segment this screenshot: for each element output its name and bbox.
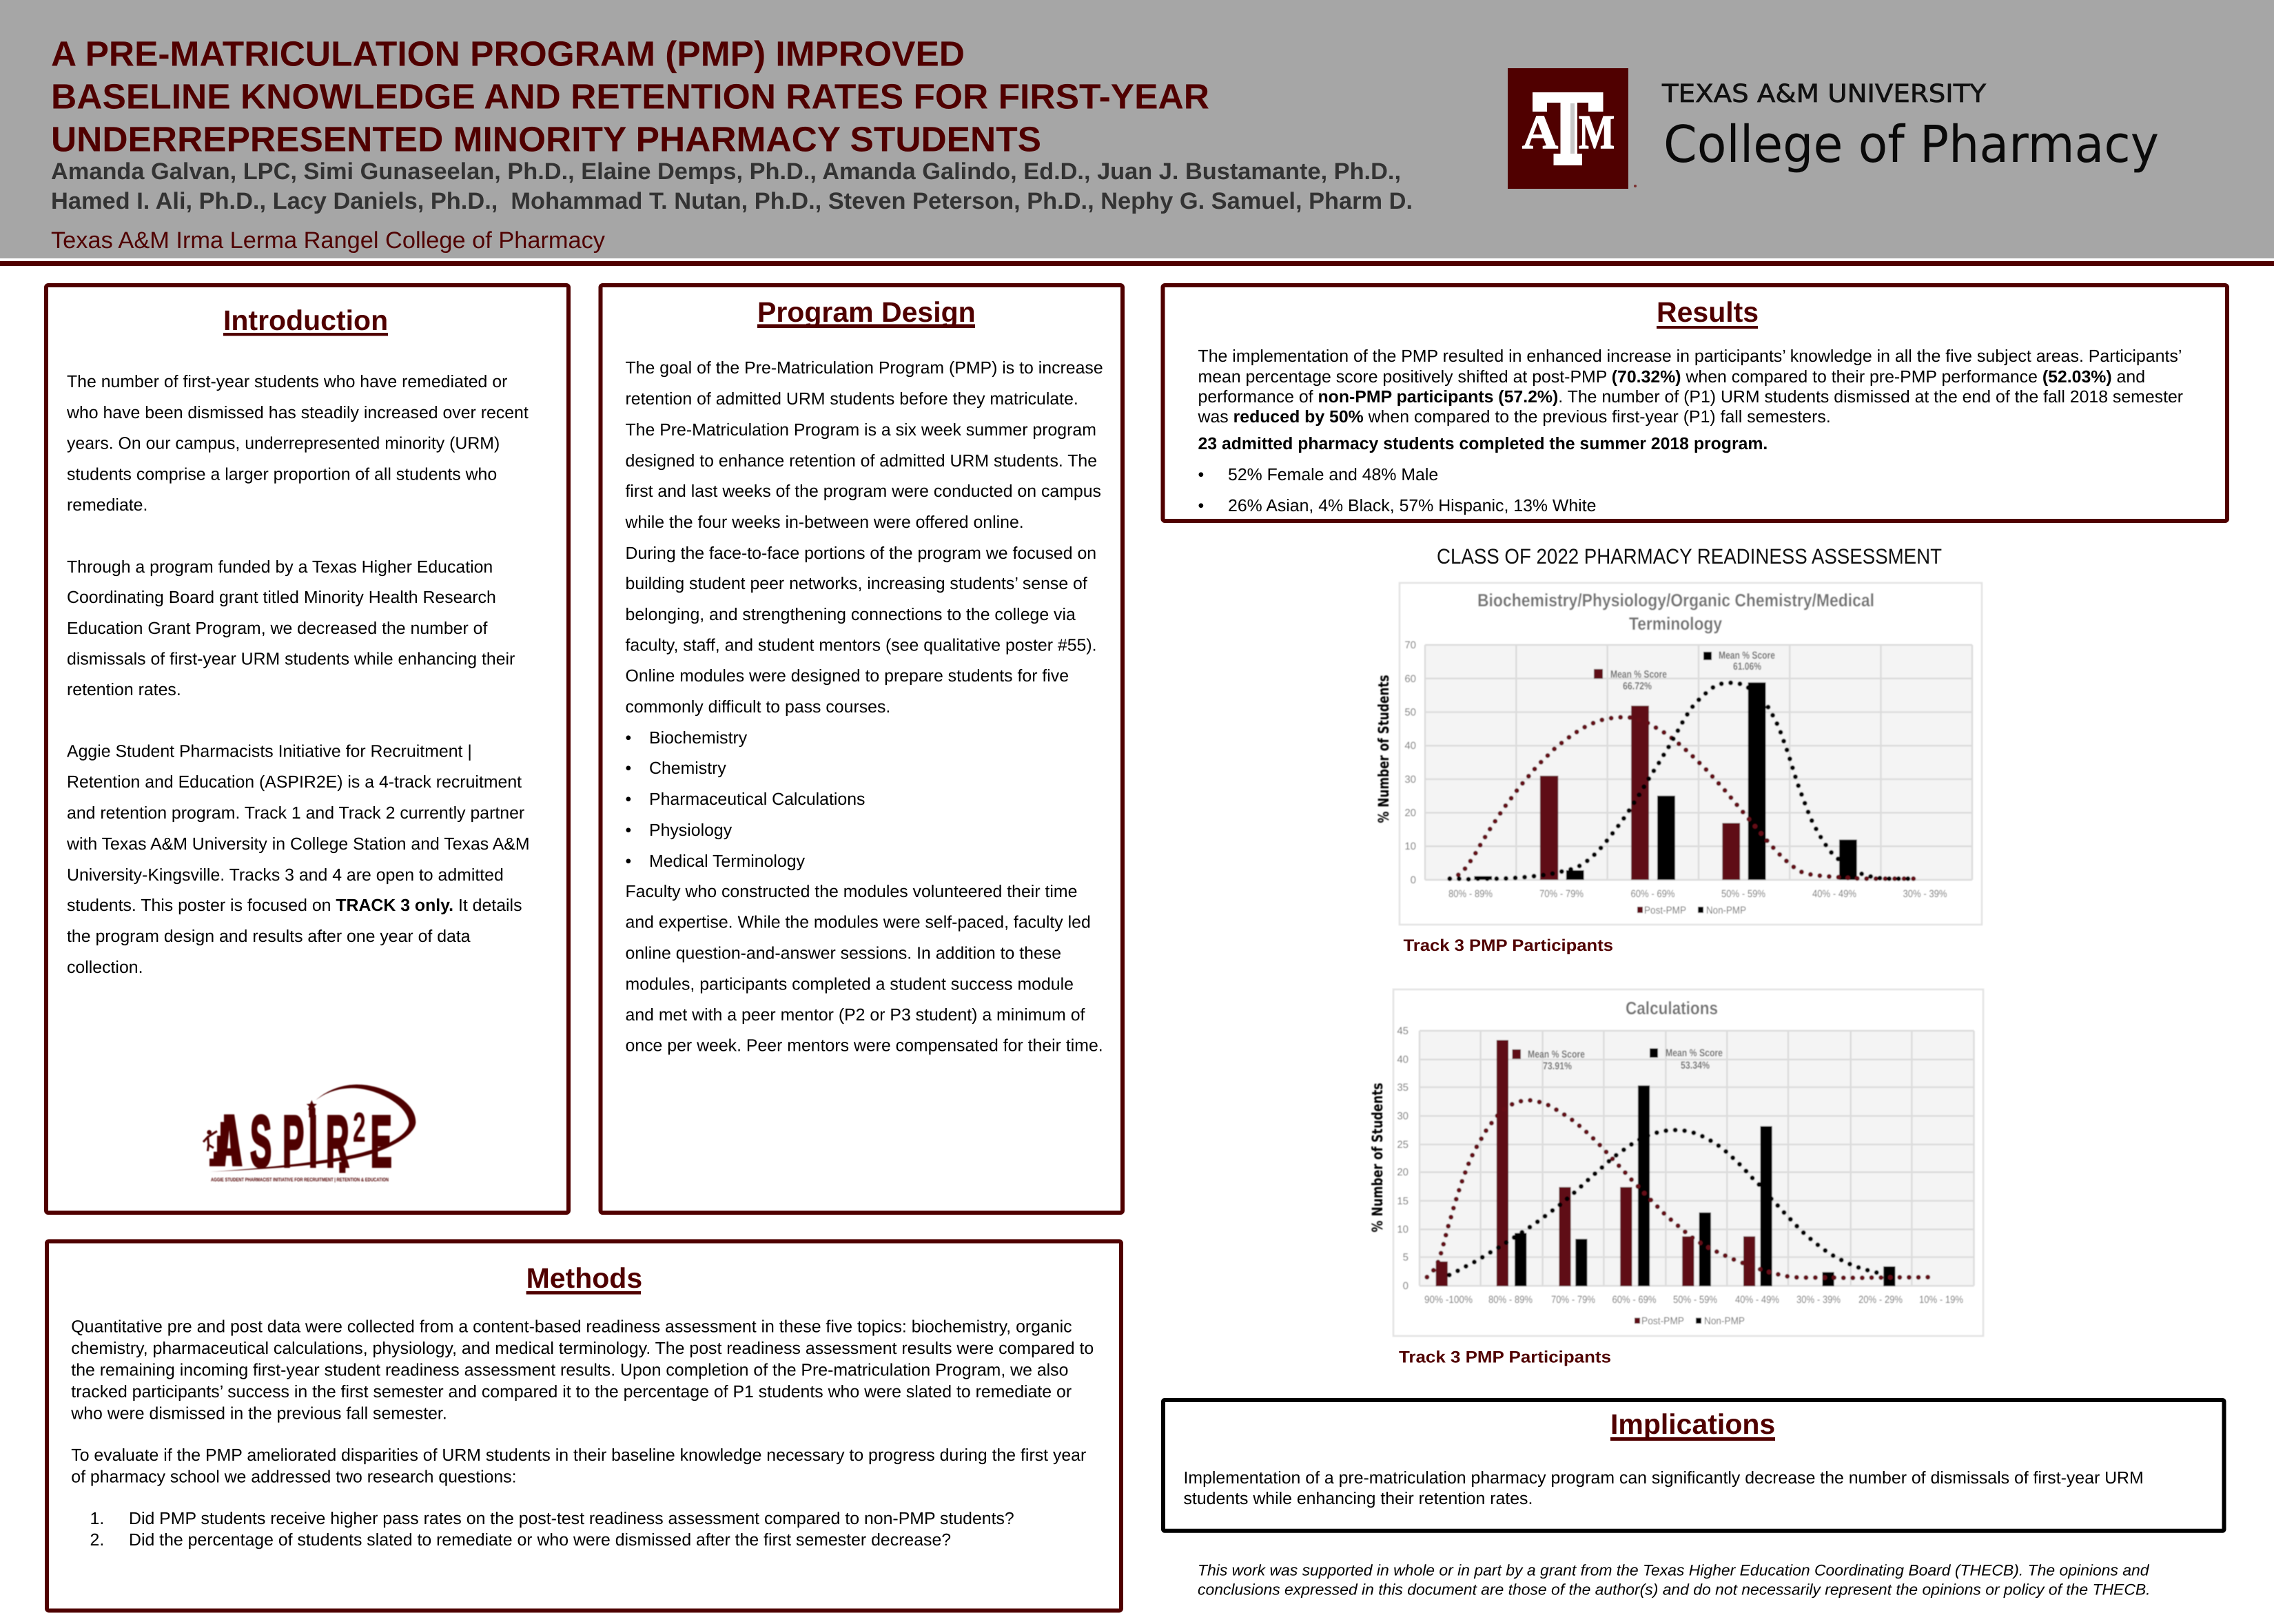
program design bullet list: • [626,790,631,809]
methods text: To evaluate if the PMP ameliorated disparities of URM students in their baseline knowledge necessary to progress during the first year [71,1446,1086,1465]
program design closing text: and met with a peer mentor (P2 or P3 student) a minimum of [626,1006,1085,1025]
program design bullet list: • [626,759,631,778]
results bullets: • [1198,466,1204,484]
program design text: retention of admitted URM students before they matriculate. [626,390,1078,409]
introduction text: Coordinating Board grant titled Minority Health Research [67,588,496,607]
x axis labels: 10% - 19% [1919,1294,1963,1306]
program design text: The Pre-Matriculation Program is a six week summer program [626,421,1096,440]
authors: Hamed I. Ali, Ph.D., Lacy Daniels, Ph.D., Mohammad T. Nutan, Ph.D., Steven Peterson, Ph.D., Nephy G. Samuel, Pharm D. [51,188,1413,214]
results text: The implementation of the PMP resulted in enhanced increase in participants’ knowledge in all the five subject areas. Participants’ [1198,347,2182,366]
introduction text: Through a program funded by a Texas Higher Education [67,558,493,577]
logo wordmark [1661,80,2159,174]
y axis ticks: 10 [1397,1224,1409,1235]
y axis ticks: 50 [1404,707,1416,718]
authors [51,158,1413,214]
introduction text: the program design and results after one year of data [67,927,471,946]
results bullets: 26% Asian, 4% Black, 57% Hispanic, 13% White [1228,497,1596,515]
x axis labels: 60% - 69% [1612,1294,1657,1306]
mean score annotations: Mean % Score [1666,1047,1723,1059]
results bullets: • [1198,497,1204,515]
methods text: chemistry, pharmaceutical calculations, physiology, and medical terminology. The post readiness assessment results were compared to [71,1339,1094,1358]
y axis ticks: 5 [1403,1251,1409,1264]
bars and distribution curves [1450,682,1916,880]
legend [1637,905,1746,916]
results text: was reduced by 50% when compared to the previous first-year (P1) fall semesters. [1198,408,1831,426]
y axis ticks: 20 [1397,1166,1409,1178]
y axis ticks: 40 [1404,740,1416,752]
program design text: faculty, staff, and student mentors (see qualitative poster #55). [626,637,1097,655]
mean score annotations: 53.34% [1681,1060,1710,1071]
research questions: 2. [90,1531,104,1550]
heading: methods: Methods [526,1262,642,1294]
x axis labels: 70% - 79% [1551,1294,1595,1306]
program design bullet list: • [626,729,631,748]
x axis labels: 90% -100% [1424,1294,1473,1306]
y axis ticks: 40 [1397,1054,1409,1065]
legend: Post-PMP [1641,1315,1684,1327]
header band [0,0,2274,266]
research questions: Did the percentage of students slated to remediate or who were dismissed after the first semester decrease? [129,1531,951,1550]
program design text: designed to enhance retention of admitted URM students. The [626,452,1097,471]
logo: ASPIR2E: AGGIE STUDENT PHARMACIST INITIATIVE FOR RECRUITMENT | RETENTION & EDUCATION [211,1177,389,1183]
authors: Amanda Galvan, LPC, Simi Gunaseelan, Ph.D., Elaine Demps, Ph.D., Amanda Galindo, Ed.D., Juan J. Bustamante, Ph.D., [51,158,1401,185]
program design bullet list: Pharmaceutical Calculations [649,790,865,809]
chart title: Terminology [1629,613,1722,634]
research questions [90,1510,1014,1550]
mean score annotations: Mean % Score [1719,650,1775,661]
legend: Non-PMP [1704,1315,1745,1327]
program design text: Online modules were designed to prepare students for five [626,667,1069,686]
program design closing text: modules, participants completed a student success module [626,976,1074,994]
results bullets: 52% Female and 48% Male [1228,466,1438,484]
logo: ASPIR2E [203,1085,416,1183]
panel: methods [47,1242,1121,1611]
chart heading: CLASS OF 2022 PHARMACY READINESS ASSESSMENT [1437,544,1942,568]
program design bullet list: Biochemistry [649,729,748,748]
panel: introduction [46,285,568,1213]
y axis title: % Number of Students [1375,675,1392,823]
y axis ticks: 25 [1397,1139,1409,1151]
results text [1198,347,2183,453]
logo wordmark: College of Pharmacy [1663,115,2159,174]
y axis ticks: 45 [1397,1025,1409,1037]
introduction text: students. This poster is focused on TRACK 3 only. It details [67,896,522,915]
y axis ticks: 0 [1403,1280,1409,1292]
x axis labels: 80% - 89% [1488,1294,1533,1306]
title: A PRE-MATRICULATION PROGRAM (PMP) IMPROVED [51,34,965,73]
program design text: while the four weeks in-between were offered online. [624,513,1024,532]
program design bullet list: • [626,821,631,840]
panel: program design [601,285,1123,1213]
mean score annotations: 73.91% [1543,1060,1572,1072]
x axis labels: 30% - 39% [1796,1294,1841,1306]
methods text: the remaining incoming first-year student readiness assessment results. Upon completion of the Pre-matriculation Program, we also [71,1361,1068,1379]
affiliation: Texas A&M Irma Lerma Rangel College of Pharmacy [51,227,605,254]
results text: 23 admitted pharmacy students completed the summer 2018 program. [1198,435,1768,453]
logo: ASPIR2E: E [371,1101,392,1182]
introduction text: Aggie Student Pharmacists Initiative for Recruitment | [67,743,472,761]
title: BASELINE KNOWLEDGE AND RETENTION RATES FOR FIRST-YEAR [51,77,1209,116]
program design closing text [626,883,1103,1056]
x axis labels: 20% - 29% [1858,1294,1903,1306]
methods text: of pharmacy school we addressed two research questions: [71,1468,517,1487]
title [51,34,1209,158]
program design bullet list: Physiology [649,821,733,840]
y axis ticks: 60 [1404,673,1416,685]
introduction text: and retention program. Track 1 and Track 2 currently partner [67,804,524,823]
introduction text: students comprise a larger proportion of all students who [67,466,497,484]
chart title: Calculations [1626,998,1718,1018]
program design closing text: online question-and-answer sessions. In addition to these [626,944,1061,963]
program design text: building student peer networks, increasing students’ sense of [626,575,1087,593]
x axis labels [1424,1294,1963,1306]
introduction text [66,373,530,977]
y axis ticks: 30 [1397,1111,1409,1122]
implications text [1184,1469,2144,1508]
introduction text: with Texas A&M University in College Station and Texas A&M [66,835,530,854]
chart title: Biochemistry/Physiology/Organic Chemistry/Medical [1477,590,1874,610]
caption: track 3: Track 3 PMP Participants [1403,936,1613,955]
introduction text: The number of first-year students who have remediated or [67,373,507,391]
program design text [624,359,1103,717]
program design text: commonly difficult to pass courses. [626,698,890,717]
methods text [70,1317,1094,1487]
logo wordmark: TEXAS A&M UNIVERSITY [1661,80,1987,108]
x axis labels: 30% - 39% [1903,888,1947,900]
x axis labels: 40% - 49% [1735,1294,1779,1306]
introduction text: Education Grant Program, we decreased the number of [67,619,487,638]
x axis labels: 70% - 79% [1539,888,1584,900]
logo: Texas A&M: M [1579,106,1615,159]
program design text: The goal of the Pre-Matriculation Program (PMP) is to increase [626,359,1103,378]
introduction text: dismissals of first-year URM students while enhancing their [67,650,515,668]
heading: program design: Program Design [757,296,976,328]
caption: track 3: Track 3 PMP Participants [1399,1348,1611,1367]
y axis ticks: 70 [1404,639,1416,651]
implications text: Implementation of a pre-matriculation pharmacy program can significantly decrease the number of dismissals of first-year URM [1184,1469,2144,1488]
results bullets [1198,466,1596,515]
legend [1635,1315,1745,1327]
panel: results [1163,285,2227,521]
introduction text: remediate. [67,496,147,515]
x axis labels: 40% - 49% [1812,888,1856,900]
chart title [1477,590,1874,634]
program design bullet list: Medical Terminology [649,852,806,871]
mean score annotations [1594,650,1775,692]
y axis ticks: 0 [1411,874,1416,886]
legend: Post-PMP [1644,905,1686,916]
implications text: students while enhancing their retention rates. [1184,1490,1533,1508]
program design text: belonging, and strengthening connections to the college via [626,606,1076,624]
program design closing text: and expertise. While the modules were self-paced, faculty led [626,914,1091,932]
chart: biochemistry physiology organic chemistry medical terminology [1375,583,1982,925]
funding acknowledgement: conclusions expressed in this document are those of the author(s) and do not necessarily represent the opinions or policy of the THECB. [1198,1581,2150,1598]
research questions: 1. [90,1510,104,1528]
heading: implications: Implications [1610,1408,1775,1440]
program design text: first and last weeks of the program were conducted on campus [626,482,1101,501]
y axis ticks [1404,639,1416,886]
heading: introduction: Introduction [223,305,388,336]
x axis labels: 60% - 69% [1630,888,1674,900]
introduction text: University-Kingsville. Tracks 3 and 4 are open to admitted [67,866,504,885]
x axis labels: 50% - 59% [1673,1294,1717,1306]
x axis labels: 80% - 89% [1448,888,1493,900]
mean score annotations: 61.06% [1733,661,1761,672]
y axis ticks: 10 [1404,841,1416,852]
logo: Texas A&M [1508,68,1637,189]
funding acknowledgement: This work was supported in whole or in part by a grant from the Texas Higher Education Coordinating Board (THECB). The opinions and [1198,1562,2150,1579]
mean score annotations: Mean % Score [1528,1049,1585,1060]
mean score annotations: Mean % Score [1610,668,1667,681]
x axis labels [1448,888,1947,900]
title: UNDERREPRESENTED MINORITY PHARMACY STUDENTS [51,120,1041,158]
methods text: who were dismissed in the previous fall semester. [70,1404,447,1423]
research questions: Did PMP students receive higher pass rates on the post-test readiness assessment compared to non-PMP students? [129,1510,1014,1528]
introduction text: who have been dismissed has steadily increased over recent [66,404,529,422]
program design bullet list: Chemistry [649,759,726,778]
x axis labels: 50% - 59% [1721,888,1765,900]
heading: results: Results [1657,296,1759,328]
results text: mean percentage score positively shifted at post-PMP (70.32%) when compared to their pre-PMP performance (52.03%) and [1198,368,2145,387]
legend: Non-PMP [1706,905,1746,916]
bars and distribution curves [1427,1040,1934,1286]
chart: calculations [1369,989,1983,1336]
methods text: tracked participants’ success in the first semester and compared it to the percentage of P1 students who were slated to remediate or [71,1383,1072,1401]
results text: performance of non-PMP participants (57.2%). The number of (P1) URM students dismissed at the end of the fall 2018 semester [1198,388,2183,407]
logo: Texas A&M: A [1522,106,1558,159]
funding acknowledgement [1198,1562,2150,1598]
introduction text: Retention and Education (ASPIR2E) is a 4-track recruitment [67,773,522,792]
program design closing text: once per week. Peer mentors were compensated for their time. [626,1036,1103,1056]
methods text: Quantitative pre and post data were collected from a content-based readiness assessment in these five topics: biochemistry, organic [71,1317,1072,1337]
introduction text: collection. [67,958,143,977]
y axis ticks: 30 [1404,774,1416,785]
program design closing text: Faculty who constructed the modules volunteered their time [626,883,1077,901]
y axis ticks: 35 [1397,1082,1409,1093]
y axis title: % Number of Students [1369,1083,1386,1232]
logo: ASPIR2E: SPIR [250,1101,349,1182]
program design bullet list [626,729,865,871]
y axis ticks: 20 [1404,808,1416,819]
introduction text: years. On our campus, underrepresented minority (URM) [67,434,500,453]
mean score annotations [1512,1047,1723,1072]
y axis ticks: 15 [1397,1195,1409,1207]
program design bullet list: • [626,852,631,871]
y axis ticks [1397,1025,1409,1292]
panel: implications [1163,1400,2224,1531]
introduction text: retention rates. [67,681,181,699]
logo: ASPIR2E: 2 [353,1104,366,1151]
mean score annotations: 66.72% [1623,681,1652,692]
program design text: During the face-to-face portions of the program we focused on [626,544,1096,563]
